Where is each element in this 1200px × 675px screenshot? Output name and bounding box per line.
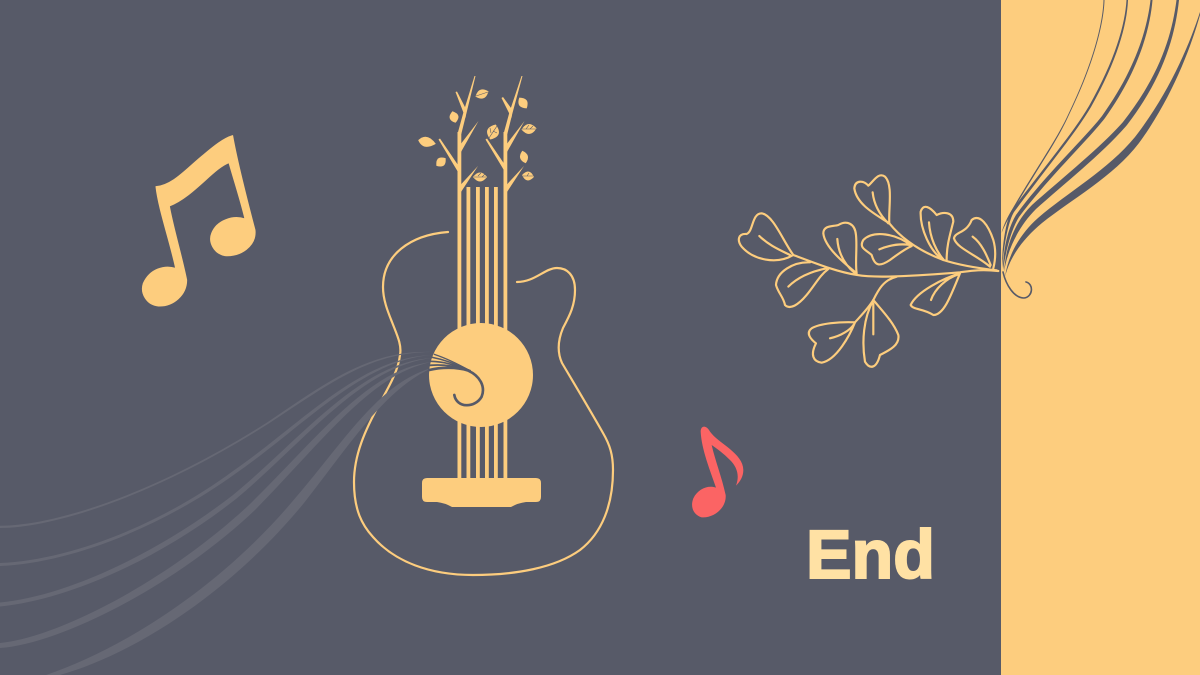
- curtain strands on the right: [1002, 0, 1200, 277]
- curtain strand curl: [1003, 272, 1031, 298]
- leaf 10: [863, 300, 898, 367]
- main stem: [793, 255, 998, 277]
- faint flowing strands on the left: [0, 352, 432, 675]
- icon: double music note: [142, 136, 255, 306]
- leaf 8: [911, 273, 960, 315]
- lower stem: [855, 277, 897, 322]
- leaf veins: [474, 92, 536, 177]
- left tree branches: [438, 76, 478, 192]
- leaf 2: [776, 262, 828, 307]
- right cream panel: [1001, 0, 1200, 675]
- bridge: [422, 478, 541, 507]
- leaf 7: [954, 218, 995, 268]
- neck strings: [458, 132, 507, 478]
- leaf 6: [921, 207, 953, 260]
- leaf 4: [854, 175, 890, 223]
- tree leaves: [417, 87, 537, 182]
- leaf 5: [862, 234, 912, 264]
- sound hole circle: [429, 323, 533, 427]
- swirl in sound hole: [429, 354, 483, 405]
- leafy branch: [739, 175, 998, 367]
- leaf 1: [739, 213, 793, 260]
- leaf 3: [823, 223, 857, 273]
- leaf 9: [809, 322, 855, 363]
- guitar body outline: [354, 232, 613, 575]
- icon: red music note: [692, 427, 743, 517]
- upper stem: [889, 223, 997, 270]
- icon: guitar: [354, 76, 613, 575]
- heading: End: End: [806, 516, 935, 593]
- right tree branches: [486, 76, 524, 192]
